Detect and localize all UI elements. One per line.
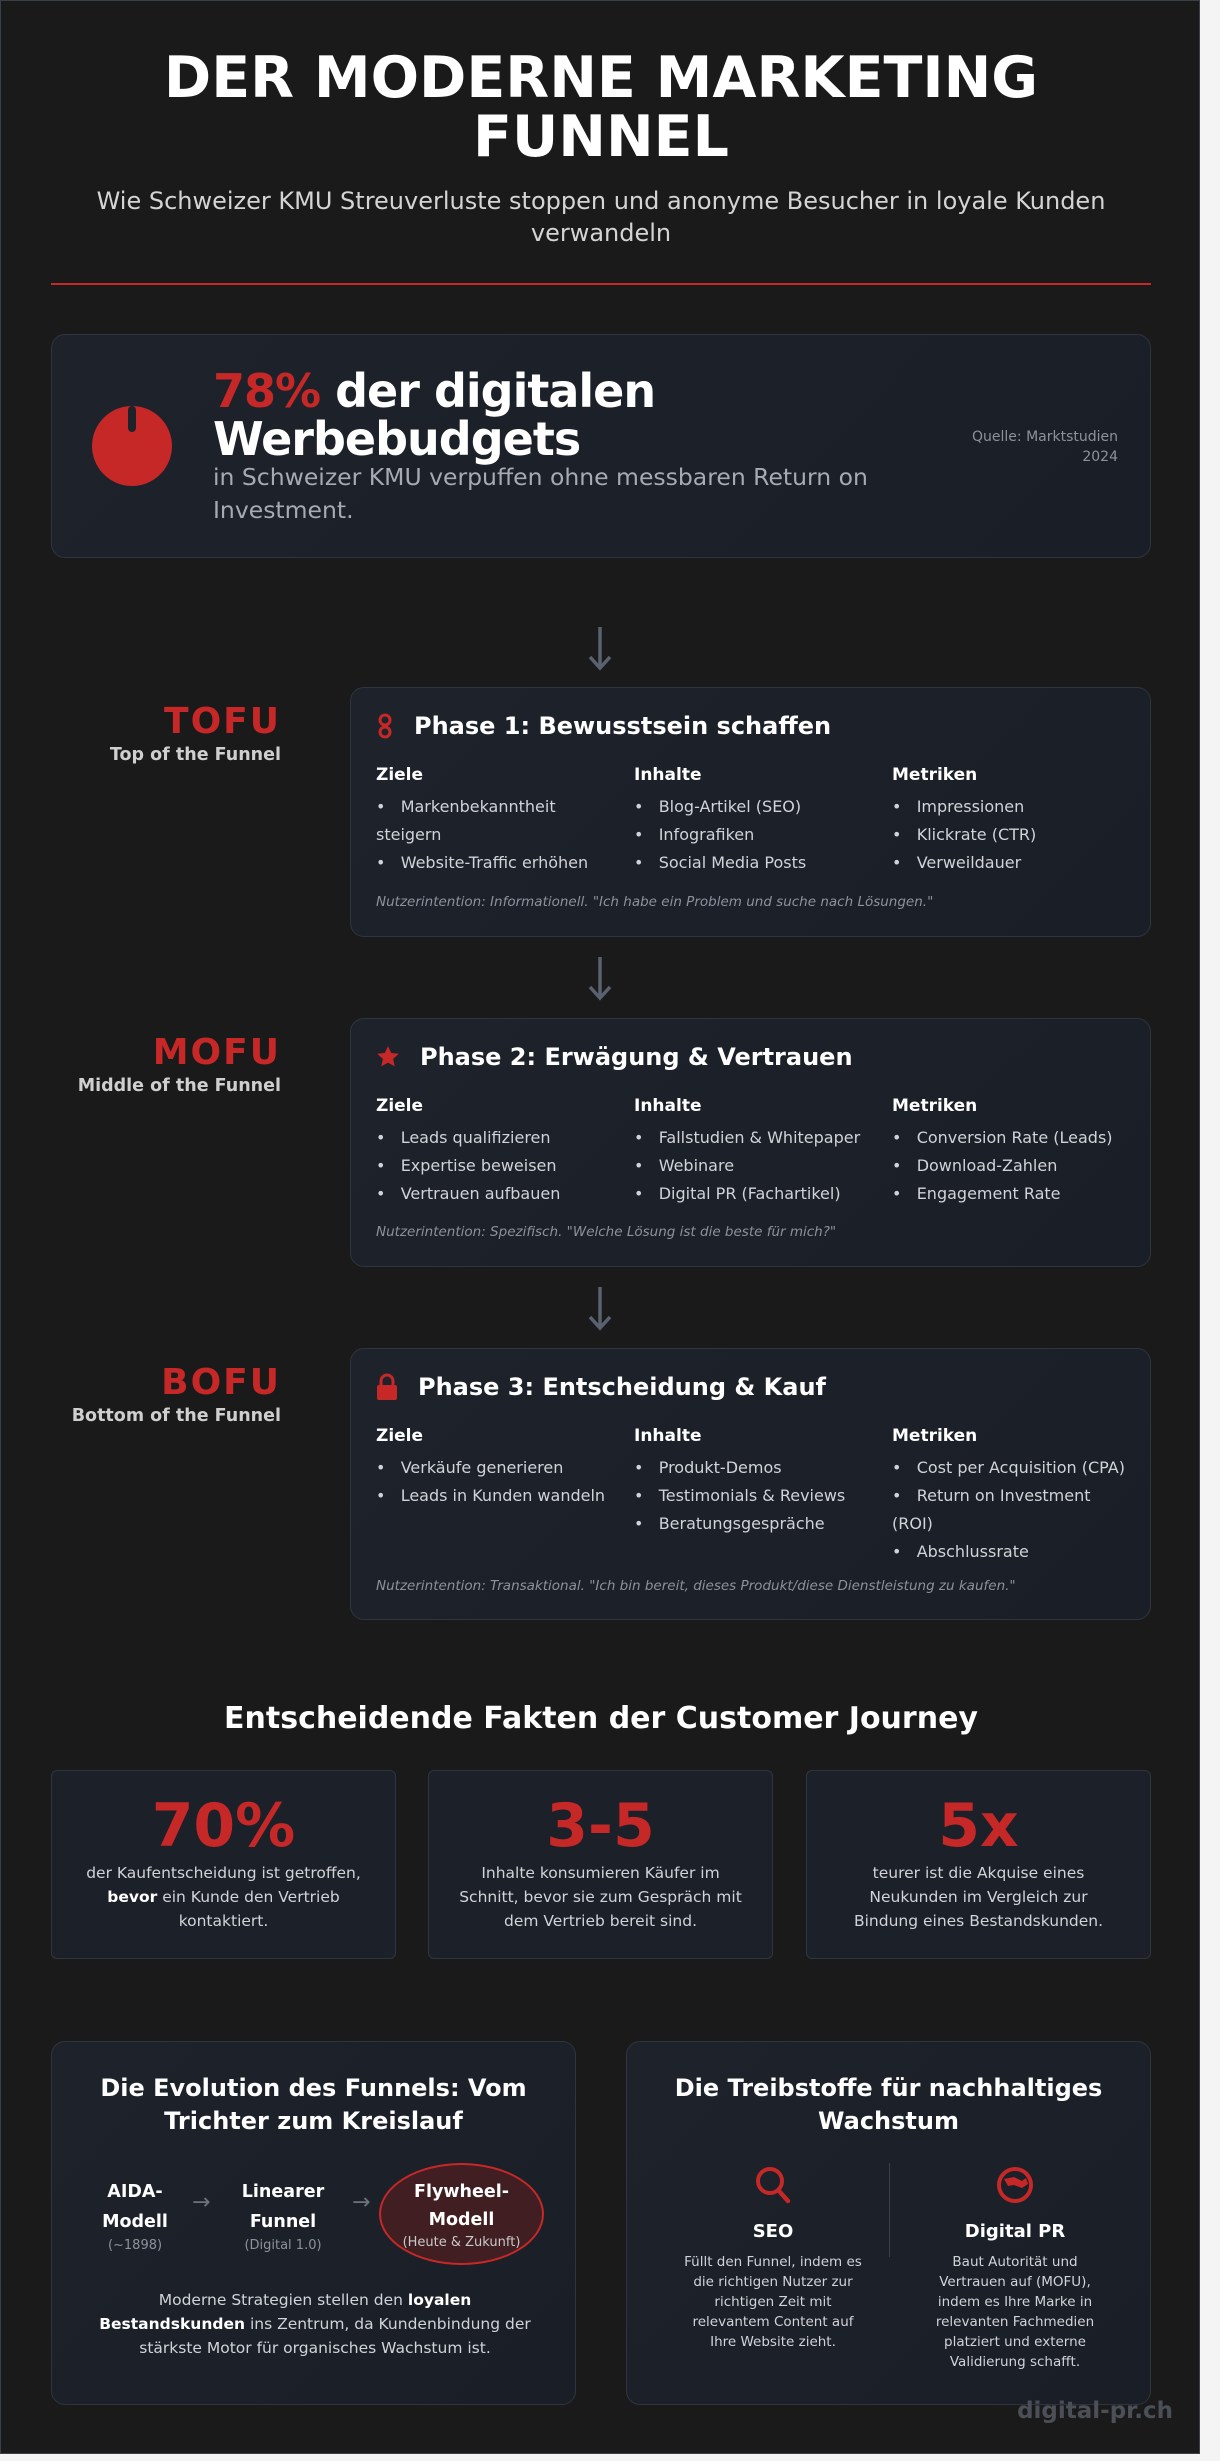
driver: Digital PR <box>936 2167 1094 2370</box>
panel: phase 1: • Markenbekanntheit steigern <box>376 797 556 844</box>
fact: 5x <box>806 1770 1151 1959</box>
panel: phase 2: • Download-Zahlen <box>892 1156 1057 1175</box>
heading: drivers: Wachstum <box>818 2107 959 2135</box>
panel: phase 1: Nutzerintention: Informationell. "Ich habe ein Problem und suche nach Lösungen." <box>376 894 933 910</box>
panel: phase 2: Nutzerintention: Spezifisch. "Welche Lösung ist die beste für mich?" <box>376 1224 836 1240</box>
fact: 3-5: Inhalte konsumieren Käufer im Schnitt, bevor sie zum Gespräch mit dem Vertrieb bereit sind. <box>459 1864 742 1930</box>
fact: 70%: 70% <box>152 1791 295 1861</box>
panel: phase 3: • Testimonials & Reviews <box>634 1486 845 1505</box>
text: evolution: Moderne Strategien stellen den loyalen Bestandskunden ins Zentrum, da Kundenbindung der stärkste Motor für organisches Wachstum ist. <box>99 2291 531 2357</box>
subtitle: Wie Schweizer KMU Streuverluste stoppen und anonyme Besucher in loyale Kunden verwandeln <box>97 187 1105 247</box>
label: MOFU <box>78 1032 281 1096</box>
flow: flywheel: Modell <box>429 2210 494 2230</box>
panel: phase 2: • Digital PR (Fachartikel) <box>634 1184 841 1203</box>
panel: phase 3: Nutzerintention: Transaktional. "Ich bin bereit, dieses Produkt/diese Dienstleistung zu kaufen." <box>376 1578 1016 1594</box>
flow: linear: (Digital 1.0) <box>244 2238 322 2253</box>
arrow: → <box>352 2190 370 2215</box>
heading: phase 3: Phase 3: Entscheidung & Kauf <box>418 1373 826 1401</box>
panel: phase 2 <box>350 1018 1151 1267</box>
arrow: → <box>192 2190 210 2215</box>
panel: evolution <box>51 2041 576 2405</box>
driver: SEO: Füllt den Funnel, indem es die richtigen Nutzer zur richtigen Zeit mit relevantem Content auf Ihre Website zieht. <box>684 2254 862 2350</box>
panel: phase 3: • Abschlussrate <box>892 1542 1029 1561</box>
title: DER MODERNE MARKETING <box>164 45 1038 111</box>
flow: flywheel: (Heute & Zukunft) <box>403 2235 520 2250</box>
panel: phase 3: • Beratungsgespräche <box>634 1514 825 1533</box>
flow: AIDA: AIDA- <box>107 2182 163 2202</box>
fact: 5x: 5x <box>938 1791 1019 1861</box>
panel: phase 3: Metriken <box>892 1426 977 1446</box>
stat headline: Werbebudgets <box>213 412 580 466</box>
panel: phase 2: • Fallstudien & Whitepaper <box>634 1128 860 1147</box>
flow: AIDA <box>102 2182 168 2253</box>
heading: evolution: Die Evolution des Funnels: Vom <box>100 2074 527 2102</box>
panel: phase 1: Ziele <box>376 765 423 785</box>
panel: phase 3: • Produkt-Demos <box>634 1458 782 1477</box>
heading: facts: Entscheidende Fakten der Customer Journey <box>224 1701 978 1736</box>
stat headline: 78% der digitalen <box>213 364 655 418</box>
label: BOFU <box>72 1362 281 1426</box>
flow: linear: Funnel <box>250 2212 316 2232</box>
stat headline <box>213 364 655 466</box>
panel: phase 1: • Infografiken <box>634 825 754 844</box>
label: TOFU: Top of the Funnel <box>110 745 281 765</box>
fact: 3-5: 3-5 <box>546 1791 655 1861</box>
flow: flywheel <box>379 2163 544 2265</box>
flow: AIDA: (~1898) <box>108 2238 162 2253</box>
panel: phase 1: • Blog-Artikel (SEO) <box>634 797 801 816</box>
label: MOFU: MOFU <box>153 1032 281 1073</box>
panel: phase 3: • Leads in Kunden wandeln <box>376 1486 605 1505</box>
panel: phase 1: Inhalte <box>634 765 702 785</box>
panel: phase 2: • Webinare <box>634 1156 734 1175</box>
flow: AIDA: Modell <box>102 2212 168 2232</box>
panel: phase 1: • Impressionen <box>892 797 1024 816</box>
footer: brand: digital-pr.ch <box>1017 2398 1173 2424</box>
stat subtext: in Schweizer KMU verpuffen ohne messbaren Return on Investment. <box>213 463 868 524</box>
title <box>164 45 1038 170</box>
icon: globe <box>997 2167 1033 2203</box>
driver: Digital PR: Digital PR <box>965 2221 1065 2242</box>
panel: phase 1: • Klickrate (CTR) <box>892 825 1036 844</box>
arrow 1 <box>588 627 612 670</box>
icon: stopwatch <box>92 406 172 486</box>
label: TOFU: TOFU <box>164 701 281 742</box>
arrow 2 <box>588 957 612 1000</box>
panel: phase 1 <box>350 687 1151 937</box>
panel: phase 2: Metriken <box>892 1096 977 1116</box>
heading: drivers <box>675 2074 1102 2135</box>
panel: phase 2: • Expertise beweisen <box>376 1156 557 1175</box>
source <box>972 429 1118 465</box>
panel: phase 2: Ziele <box>376 1096 423 1116</box>
fact: 3-5 <box>428 1770 773 1959</box>
panel: phase 3: • Cost per Acquisition (CPA) <box>892 1458 1125 1477</box>
panel: phase 2: • Vertrauen aufbauen <box>376 1184 560 1203</box>
title: FUNNEL <box>473 104 729 170</box>
panel: phase 3: Inhalte <box>634 1426 702 1446</box>
fact: 5x: teurer ist die Akquise eines Neukunden im Vergleich zur Bindung eines Bestandskunden. <box>854 1864 1103 1930</box>
label: MOFU: Middle of the Funnel <box>78 1076 281 1096</box>
heading: phase 2: Phase 2: Erwägung & Vertrauen <box>420 1043 853 1071</box>
flow: linear: Linearer <box>242 2182 324 2202</box>
panel: phase 3: • Verkäufe generieren <box>376 1458 563 1477</box>
flow: linear <box>242 2182 324 2253</box>
heading: evolution <box>100 2074 527 2135</box>
panel: phase 2: Inhalte <box>634 1096 702 1116</box>
heading: drivers: Die Treibstoffe für nachhaltiges <box>675 2074 1102 2102</box>
panel: phase 3: Ziele <box>376 1426 423 1446</box>
arrow 3 <box>588 1287 612 1330</box>
panel: phase 2: • Engagement Rate <box>892 1184 1061 1203</box>
panel: phase 3 <box>350 1348 1151 1620</box>
flow: flywheel: Flywheel- <box>414 2182 509 2202</box>
icon: magnifier <box>756 2167 790 2204</box>
panel: phase 2: • Leads qualifizieren <box>376 1128 551 1147</box>
label: TOFU <box>110 701 281 765</box>
panel: growth drivers <box>626 2041 1151 2405</box>
panel: phase 1: • Social Media Posts <box>634 853 806 872</box>
panel: phase 3: • Return on Investment (ROI) <box>892 1486 1091 1533</box>
source: 2024 <box>1082 449 1118 465</box>
stat card: 78% <box>51 334 1151 558</box>
driver: SEO: SEO <box>753 2221 793 2242</box>
panel: phase 2: • Conversion Rate (Leads) <box>892 1128 1113 1147</box>
label: BOFU: Bottom of the Funnel <box>72 1406 281 1426</box>
source: Quelle: Marktstudien <box>972 429 1118 445</box>
fact: 70%: der Kaufentscheidung ist getroffen, bevor ein Kunde den Vertrieb kontaktiert. <box>86 1864 361 1930</box>
panel: phase 1: Metriken <box>892 765 977 785</box>
driver: SEO <box>684 2167 862 2350</box>
panel: phase 1: • Website-Traffic erhöhen <box>376 853 588 872</box>
label: BOFU: BOFU <box>161 1362 281 1403</box>
driver: Digital PR: Baut Autorität und Vertrauen auf (MOFU), indem es Ihre Marke in relevanten Fachmedien platziert und externe Validierung schafft. <box>936 2254 1094 2370</box>
heading: evolution: Trichter zum Kreislauf <box>164 2107 463 2135</box>
panel: phase 1: • Verweildauer <box>892 853 1021 872</box>
heading: phase 1: Phase 1: Bewusstsein schaffen <box>414 712 831 740</box>
fact: 70% <box>51 1770 396 1959</box>
